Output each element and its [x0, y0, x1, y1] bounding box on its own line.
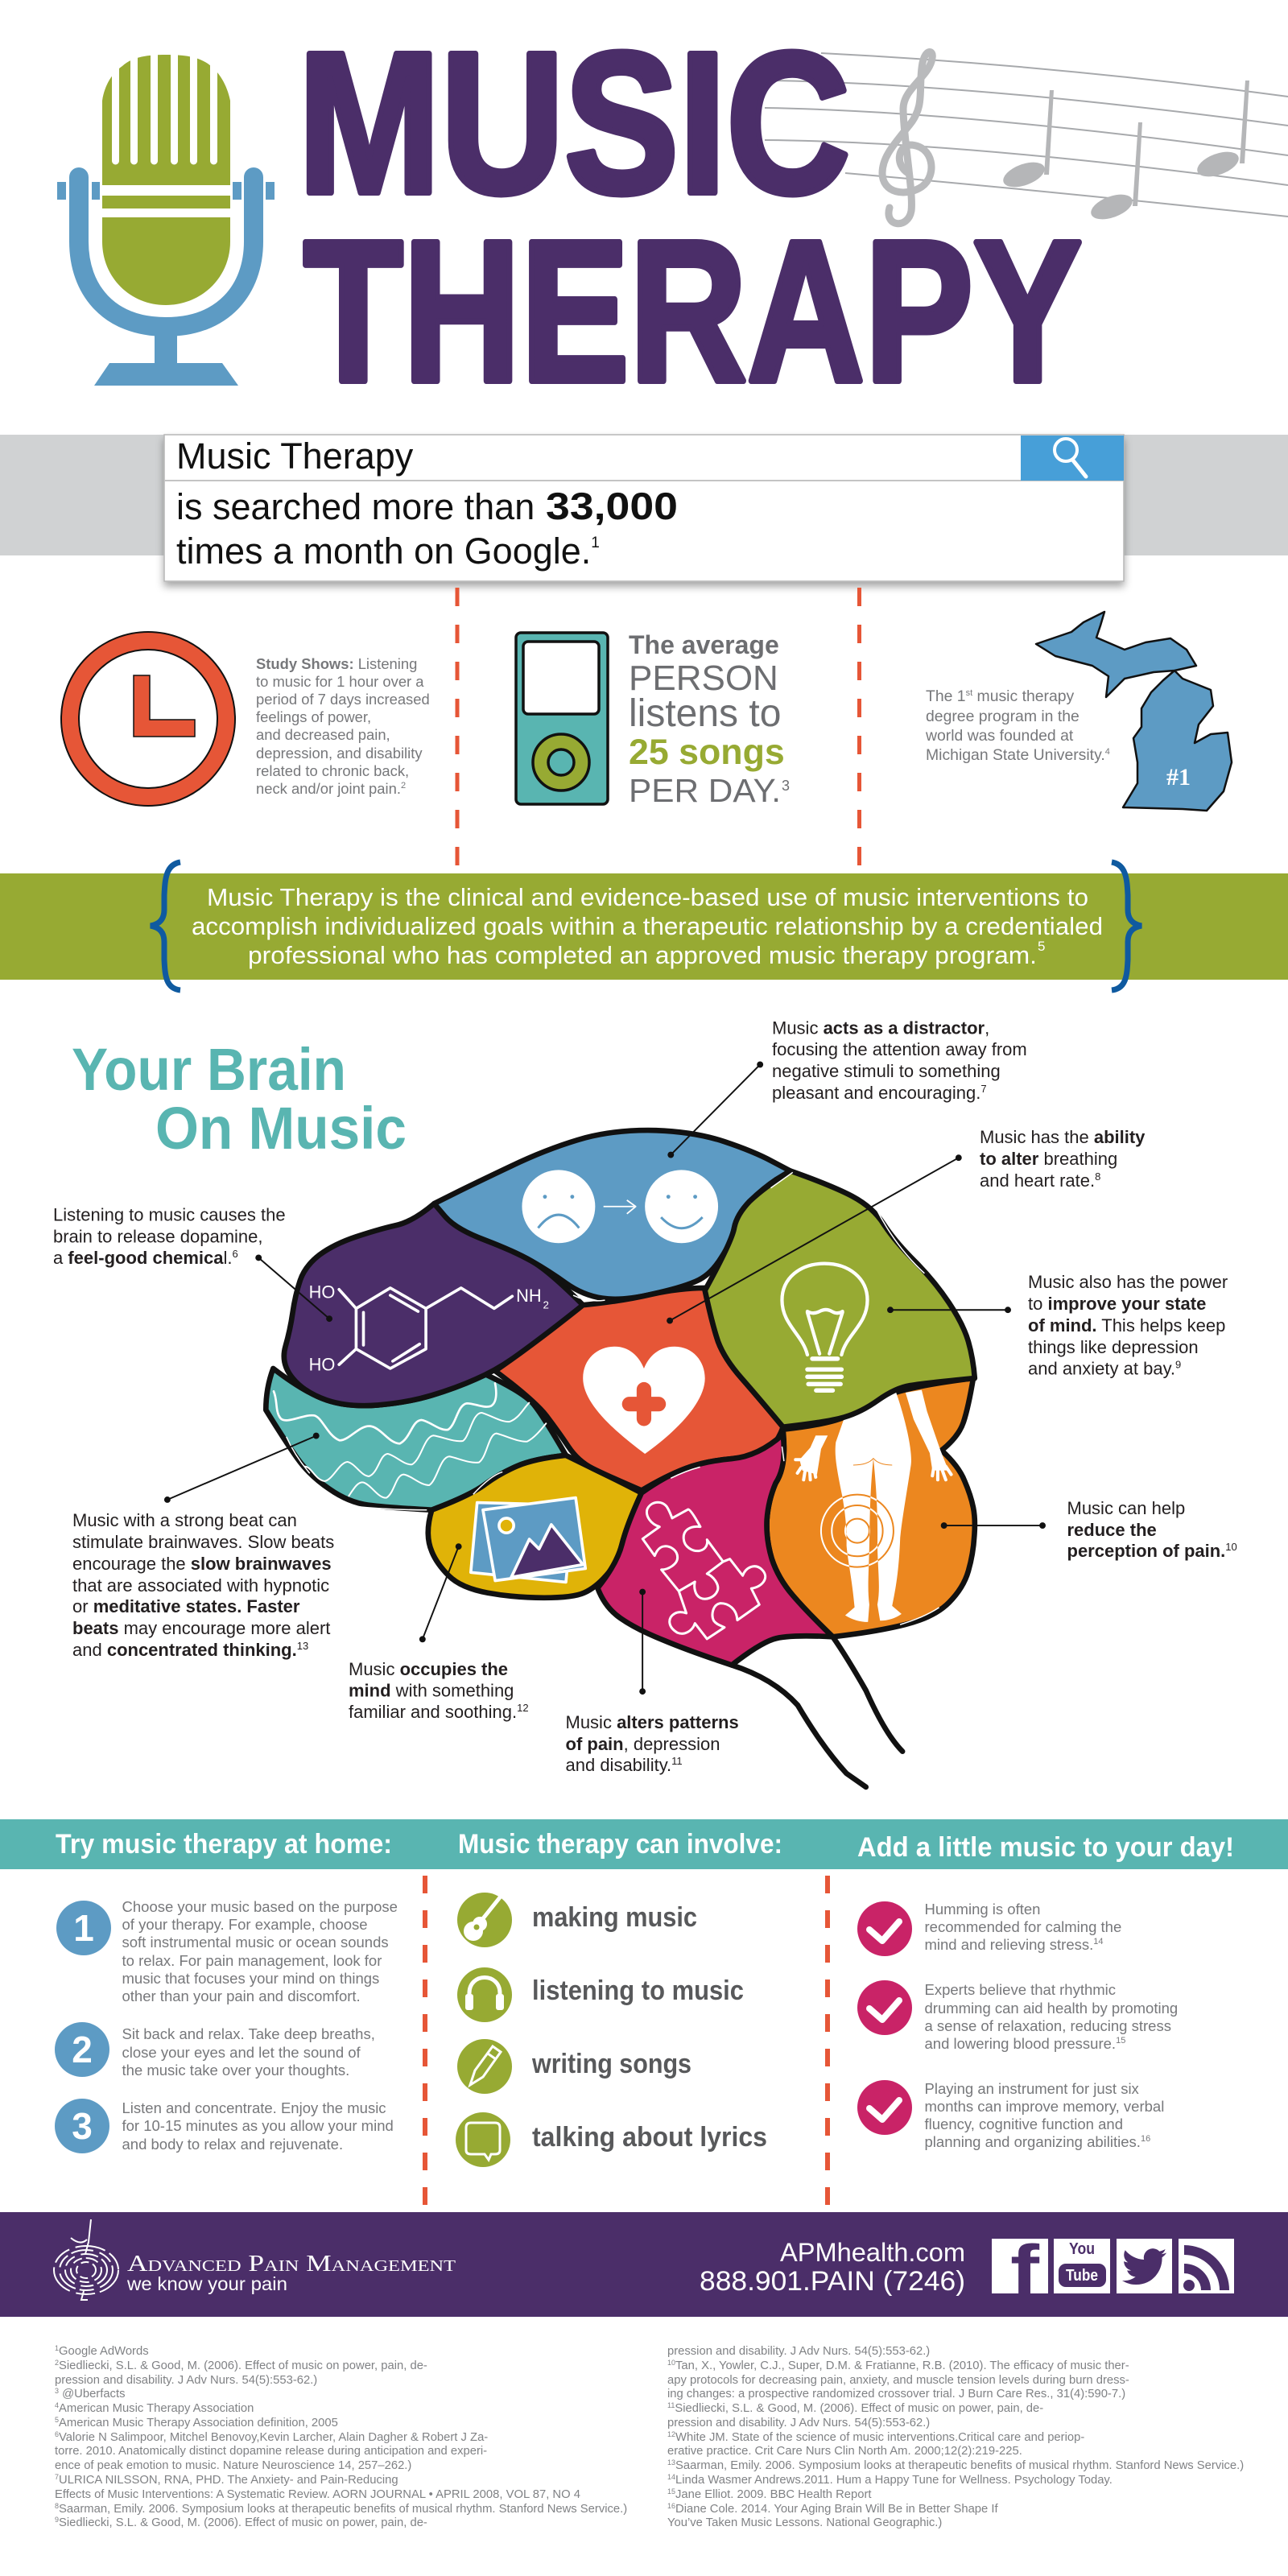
references left column: ence of peak emotion to music. Nature Neuroscience 14, 257–262.) — [55, 2459, 411, 2472]
region: teal brainwaves — [266, 1368, 566, 1510]
tip: instrument: planning and organizing abilities. — [924, 2133, 1141, 2150]
icon: facebook — [992, 2231, 1048, 2309]
icon: speech bubble — [466, 2123, 500, 2160]
tip: drumming: a sense of relaxation, reducing stress — [924, 2017, 1171, 2034]
callout: state of mind: Music also has the power — [1028, 1272, 1228, 1292]
icon: puzzle pieces — [642, 1502, 766, 1639]
michigan state text: music therapy — [972, 687, 1075, 705]
icon: michigan map — [1036, 612, 1232, 811]
title: MUSIC — [298, 10, 850, 235]
icon: pictures — [471, 1498, 585, 1582]
callout: alters patterns: 11 — [671, 1755, 683, 1767]
definition band: professional who has completed an approved music therapy program. — [248, 942, 1037, 969]
callout: alters patterns: , depression — [624, 1734, 720, 1754]
step 1 — [56, 1898, 398, 2004]
callout: state of mind: things like depression — [1028, 1337, 1199, 1357]
references right column: pression and disability. J Adv Nurs. 54(5):553-62.) — [667, 2345, 930, 2358]
brain diagram — [164, 1061, 1046, 1787]
references right column: Diane Cole. 2014. Your Aging Brain Will Be in Better Shape If — [675, 2503, 998, 2516]
callout: brainwaves: concentrated thinking. — [107, 1640, 297, 1660]
step 2 — [55, 2022, 375, 2079]
references left column: torre. 2010. Anatomically distinct dopamine release during anticipation and experi- — [55, 2445, 487, 2458]
tip: humming: recommended for calming the — [924, 1918, 1121, 1935]
heading: your brain on music: On Music — [155, 1095, 407, 1162]
study shows text: depression, and disability — [256, 745, 423, 762]
left brace — [151, 862, 180, 990]
search statistic: 33,000 — [546, 485, 678, 527]
callout: breathing: 8 — [1095, 1170, 1100, 1183]
icon: dopamine molecule: 2 — [543, 1298, 549, 1311]
icon: headphones — [465, 1977, 504, 2010]
callout: brainwaves: beats — [72, 1618, 118, 1638]
callout: breathing: breathing — [1038, 1149, 1117, 1169]
average songs stat: listens to — [629, 692, 781, 735]
callout: brainwaves: Music with a strong beat can — [72, 1510, 297, 1530]
references right column: ing changes: a prospective randomized crossover trial. J Burn Care Res., 31(4):590-7.) — [667, 2388, 1125, 2401]
references right column: Siedliecki, S.L. & Good, M. (2006). Effect of music on power, pain, de- — [675, 2402, 1043, 2415]
callout: distractor: negative stimuli to something — [772, 1061, 1001, 1081]
references left column: Siedliecki, S.L. & Good, M. (2006). Effect of music on power, pain, de- — [59, 2359, 427, 2372]
icon: youtube: Tube — [1066, 2267, 1098, 2285]
callout: occupies the mind: mind — [349, 1681, 391, 1700]
references right column: 12 — [667, 2430, 675, 2438]
step 1: 1 — [73, 1907, 94, 1949]
callout: pain perception: Music can help — [1067, 1498, 1185, 1518]
heading: can involve: Music therapy can involve: — [458, 1829, 782, 1860]
average songs stat: 3 — [782, 778, 790, 794]
definition band: accomplish individualized goals within a therapeutic relationship by a credentialed — [192, 913, 1103, 940]
tip: instrument: fluency, cognitive function and — [924, 2116, 1123, 2132]
title: THERAPY — [303, 199, 1082, 423]
callout: brainwaves: and — [72, 1640, 107, 1660]
phone number: 888.901.PAIN (7246) — [700, 2266, 965, 2297]
section header bar — [0, 1819, 1288, 1869]
references right column: 11 — [667, 2401, 675, 2409]
callout: breathing: Music has the — [980, 1127, 1094, 1147]
study shows text: period of 7 days increased — [256, 691, 430, 708]
step 1: soft instrumental music or ocean sounds — [122, 1934, 389, 1951]
michigan state text: st — [966, 688, 972, 698]
definition band — [0, 873, 1288, 980]
callout: distractor: acts as a distractor, — [824, 1018, 989, 1038]
icon: youtube: You — [1069, 2240, 1095, 2258]
references right column: Linda Wasmer Andrews.2011. Hum a Happy Tune for Wellness. Psychology Today. — [675, 2474, 1113, 2487]
tip: drumming: Experts believe that rhythmic — [924, 1981, 1116, 1998]
icon: heart with cross — [583, 1347, 705, 1454]
step 3: and body to relax and rejuvenate. — [122, 2136, 343, 2153]
icon: dopamine molecule: HO — [309, 1354, 335, 1374]
icon: music notes — [1000, 80, 1249, 224]
icon: twitter — [1117, 2239, 1172, 2293]
search statistic: times a month on Google. — [176, 530, 591, 572]
callout: alters patterns: Music — [565, 1712, 617, 1732]
references left column: American Music Therapy Association definition, 2005 — [59, 2417, 338, 2429]
heading: your brain on music — [72, 1036, 407, 1162]
heading: try at home: Try music therapy at home: — [56, 1829, 392, 1860]
callout: alters patterns: of pain — [565, 1734, 624, 1754]
study shows text: Study Shows: — [256, 655, 354, 672]
references right column: 13 — [667, 2458, 675, 2467]
tip: humming: 14 — [1093, 1937, 1104, 1946]
callout: state of mind: This helps keep — [1097, 1315, 1225, 1335]
callout: state of mind: to — [1028, 1294, 1047, 1314]
search button — [1021, 436, 1124, 481]
callout: state of mind: of mind. — [1028, 1315, 1097, 1335]
step 2: 2 — [72, 2029, 93, 2070]
average songs stat — [629, 630, 790, 809]
callout: breathing: ability — [1094, 1127, 1146, 1147]
icon: dopamine molecule: NH — [516, 1286, 542, 1306]
icon: dopamine molecule: HO — [309, 1282, 335, 1302]
callout: alters patterns: alters patterns — [617, 1712, 739, 1732]
tip: drumming: 15 — [1116, 2036, 1125, 2046]
tip: drumming — [857, 1980, 1178, 2052]
study shows text: to music for 1 hour over a — [256, 673, 424, 690]
step 2: close your eyes and let the sound of — [122, 2044, 361, 2061]
tip: humming: Humming is often — [924, 1901, 1040, 1918]
region: yellow mind — [428, 1455, 642, 1598]
references right column: 15 — [667, 2487, 675, 2496]
callout: distractor: Music — [772, 1018, 824, 1038]
right brace — [1112, 862, 1141, 990]
references left column: 1 — [55, 2344, 59, 2352]
callout: occupies the mind: 12 — [517, 1702, 529, 1714]
step 3: for 10-15 minutes as you allow your mind — [122, 2117, 394, 2134]
icon: body with pain target — [795, 1385, 952, 1622]
study shows text: feelings of power, — [256, 708, 371, 725]
callout: distractor: pleasant and encouraging. — [772, 1083, 980, 1103]
icon: sad to happy face — [522, 1170, 718, 1243]
step 1: music that focuses your mind on things — [122, 1970, 379, 1987]
references left column: 6 — [55, 2430, 59, 2438]
callout: breathing: and heart rate. — [980, 1170, 1095, 1191]
references left column: Google AdWords — [59, 2345, 149, 2358]
tip: drumming: drumming can aid health by promoting — [924, 2000, 1178, 2017]
icon: clock — [70, 641, 226, 797]
heading: add music: Add a little music to your day! — [857, 1832, 1234, 1863]
references left column: @Uberfacts — [59, 2388, 125, 2401]
references left column: 2 — [55, 2359, 59, 2367]
callout: dopamine: Listening to music causes the — [53, 1204, 286, 1225]
brain stem — [732, 1637, 902, 1787]
heading: your brain on music: Your Brain — [72, 1036, 346, 1103]
company name: Advanced Pain Management — [127, 2251, 456, 2277]
references left column: Saarman, Emily. 2006. Symposium looks at therapeutic benefits of musical rhythm. Stanford News Service.) — [59, 2503, 627, 2516]
callout: alters patterns: and disability. — [565, 1755, 671, 1775]
item: listening to music — [457, 1967, 744, 2022]
icon: dopamine molecule — [309, 1282, 549, 1374]
average songs stat: PER DAY. — [629, 772, 781, 809]
item: writing songs: writing songs — [531, 2049, 691, 2079]
tip: drumming: and lowering blood pressure. — [924, 2035, 1116, 2052]
references right column: Jane Elliot. 2009. BBC Health Report — [675, 2488, 871, 2501]
average songs stat: The average — [629, 630, 779, 659]
references right column: pression and disability. J Adv Nurs. 54(5):553-62.) — [667, 2417, 930, 2429]
tip: instrument: 16 — [1141, 2134, 1150, 2144]
references left column: American Music Therapy Association — [59, 2402, 254, 2415]
icon: rss — [1179, 2239, 1234, 2293]
region: orange pain — [766, 1378, 975, 1637]
callout: brainwaves: 13 — [297, 1640, 308, 1652]
callout: occupies the mind: with something — [391, 1681, 514, 1700]
callout: dopamine: brain to release dopamine, — [53, 1227, 262, 1246]
callout: occupies the mind: familiar and soothing. — [349, 1702, 517, 1722]
callout: brainwaves: meditative states. Faster — [93, 1596, 300, 1616]
region: red heart — [495, 1288, 783, 1490]
study shows text: neck and/or joint pain. — [256, 780, 401, 797]
step 1: to relax. For pain management, look for — [122, 1952, 382, 1969]
item: talking about lyrics — [456, 2112, 767, 2167]
item: listening to music: listening to music — [532, 1975, 744, 2006]
michigan state text: The 1 — [926, 687, 966, 705]
tip: humming — [857, 1901, 1121, 1956]
callout: brainwaves: encourage the — [72, 1554, 191, 1574]
icon: youtube — [1054, 2239, 1110, 2293]
michigan state text: degree program in the — [926, 708, 1080, 725]
icon: pencil — [470, 2046, 501, 2085]
definition band: 5 — [1038, 939, 1045, 954]
item: writing songs — [457, 2039, 691, 2094]
references right column: erative practice. Crit Care Nurs Clin North Am. 2000;12(2):219-225. — [667, 2445, 1022, 2458]
search query: Music Therapy — [176, 436, 414, 477]
step 2: the music take over your thoughts. — [122, 2062, 349, 2079]
michigan state text: Michigan State University. — [926, 746, 1105, 764]
step 1: Choose your music based on the purpose — [122, 1898, 398, 1915]
search panel — [0, 435, 1288, 581]
callout: dopamine: 6 — [233, 1248, 238, 1260]
callout: state of mind: and anxiety at bay. — [1028, 1359, 1175, 1378]
tip: humming: mind and relieving stress. — [924, 1936, 1093, 1953]
region: green mind state — [705, 1171, 975, 1427]
icon: music player — [516, 633, 608, 804]
callout: occupies the mind: Music — [349, 1659, 400, 1679]
references left column: Siedliecki, S.L. & Good, M. (2006). Effect of music on power, pain, de- — [59, 2516, 427, 2529]
references left column: 4 — [55, 2401, 59, 2409]
tip: instrument — [857, 2080, 1164, 2150]
item: making music: making music — [532, 1902, 697, 1933]
callout: occupies the mind: occupies the — [400, 1659, 508, 1679]
references right column: Saarman, Emily. 2006. Symposium looks at therapeutic benefits of musical rhythm. Stanford News Service.) — [675, 2459, 1244, 2472]
callout: state of mind: improve your state — [1047, 1294, 1206, 1314]
references left column: 5 — [55, 2416, 59, 2424]
callout: brainwaves: may encourage more alert — [118, 1618, 330, 1638]
callout: pain perception: reduce the — [1067, 1520, 1157, 1540]
callout pointers — [164, 1061, 1046, 1695]
region: pink patterns — [597, 1435, 832, 1665]
step 3: Listen and concentrate. Enjoy the music — [122, 2099, 386, 2116]
step 2: Sit back and relax. Take deep breaths, — [122, 2025, 375, 2042]
michigan state text: world was founded at — [925, 727, 1074, 745]
callout: dopamine: feel-good chemical. — [68, 1248, 233, 1268]
website: APMhealth.com — [780, 2237, 965, 2267]
icon: facebook: f — [1010, 2231, 1039, 2309]
study shows text: and decreased pain, — [256, 726, 390, 743]
icon: light bulb — [782, 1264, 867, 1390]
references left column: pression and disability. J Adv Nurs. 54(5):553-62.) — [55, 2374, 317, 2387]
references right column: White JM. State of the science of music interventions.Critical care and periop- — [675, 2431, 1084, 2444]
michigan state text: 4 — [1105, 747, 1110, 757]
step 1: other than your pain and discomfort. — [122, 1988, 361, 2004]
callout: distractor: focusing the attention away from — [772, 1039, 1027, 1059]
references right column: 14 — [667, 2473, 675, 2481]
callout: distractor: 7 — [980, 1083, 987, 1095]
definition band: Music Therapy is the clinical and evidence-based use of music interventions to — [207, 884, 1088, 911]
icon: michigan map: #1 — [1166, 764, 1191, 791]
study shows text: 2 — [401, 781, 406, 791]
references left column: ULRICA NILSSON, RNA, PHD. The Anxiety- and Pain-Reducing — [59, 2474, 398, 2487]
references left column: 9 — [55, 2516, 59, 2524]
search statistic: 1 — [591, 535, 600, 551]
item: making music — [457, 1893, 697, 1947]
references left column: 3 — [55, 2387, 59, 2395]
icon: guitar — [464, 1897, 500, 1941]
references left column: 7 — [55, 2473, 59, 2481]
music staff decoration — [765, 53, 1288, 217]
callout: pain perception: 10 — [1225, 1541, 1237, 1553]
callout: dopamine: a — [53, 1248, 68, 1268]
references right column: Tan, X., Yowler, C.J., Super, D.M. & Fratianne, R.B. (2010). The efficacy of music ther- — [675, 2359, 1129, 2372]
references right column: apy protocols for decreasing pain, anxiety, and muscle tension levels during burn dress- — [667, 2374, 1129, 2387]
region: purple dopamine — [284, 1203, 583, 1406]
icon: microphone — [57, 48, 275, 386]
tagline: we know your pain — [126, 2273, 287, 2294]
step 3 — [55, 2099, 394, 2153]
study shows text: related to chronic back, — [256, 762, 409, 779]
search statistic: is searched more than — [176, 486, 535, 527]
callout: brainwaves: that are associated with hypnotic — [72, 1575, 329, 1596]
callout: brainwaves: or — [72, 1596, 93, 1616]
callout: pain perception: perception of pain. — [1067, 1541, 1225, 1561]
references left column: Effects of Music Interventions: A Systematic Review. AORN JOURNAL • APRIL 2008, VOL 87, NO 4 — [55, 2488, 580, 2501]
footer band — [0, 2212, 1288, 2317]
average songs stat: 25 songs — [629, 733, 785, 772]
callout: state of mind: 9 — [1175, 1359, 1181, 1370]
logo swirl — [54, 2219, 118, 2300]
study shows text: Listening — [354, 655, 417, 672]
tip: instrument: months can improve memory, verbal — [924, 2098, 1164, 2115]
references right column: You’ve Taken Music Lessons. National Geographic.) — [667, 2516, 942, 2529]
references right column: 16 — [667, 2502, 675, 2510]
icon: treble clef — [882, 52, 932, 224]
region: blue distractor — [434, 1130, 791, 1299]
callout: breathing: to alter — [980, 1149, 1039, 1169]
references right column: 10 — [667, 2359, 675, 2367]
references left column: Valorie N Salimpoor, Mitchel Benovoy,Kevin Larcher, Alain Dagher & Robert J Za- — [59, 2431, 488, 2444]
callout: brainwaves: stimulate brainwaves. Slow beats — [72, 1532, 334, 1552]
title — [298, 10, 1082, 423]
callout: brainwaves: slow brainwaves — [191, 1554, 332, 1574]
references left column: 8 — [55, 2502, 59, 2510]
item: talking about lyrics: talking about lyrics — [532, 2122, 767, 2153]
step 1: of your therapy. For example, choose — [122, 1916, 368, 1933]
tip: instrument: Playing an instrument for just six — [924, 2080, 1140, 2097]
step 3: 3 — [72, 2105, 93, 2147]
average songs stat: PERSON — [629, 658, 778, 698]
